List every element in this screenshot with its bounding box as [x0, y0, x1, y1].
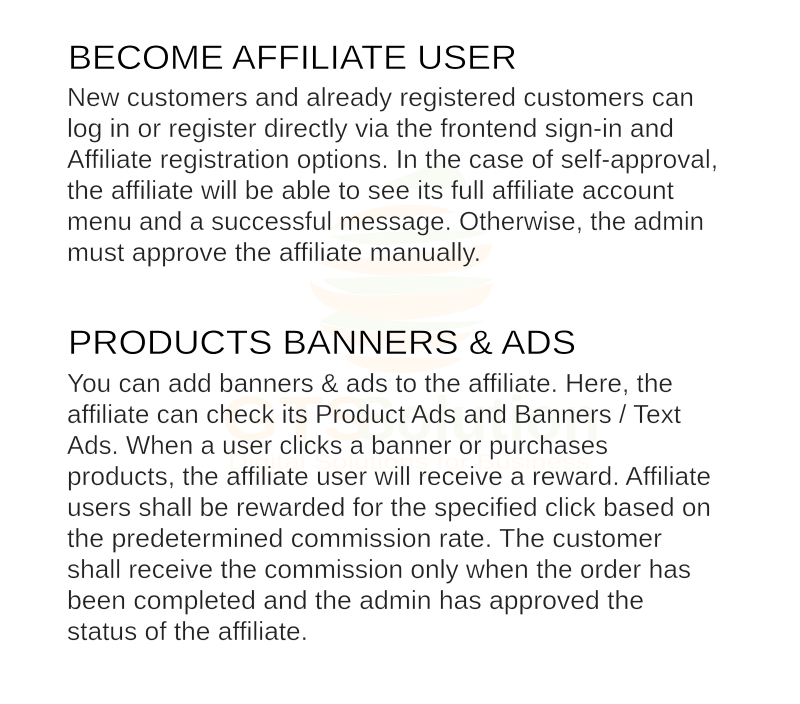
text block: become affiliate user: New customers and already registered customers can [67, 82, 694, 112]
text block: products banners and ads: status of the affiliate. [67, 616, 308, 646]
text block: products banners and ads: Ads. When a user clicks a banner or purchases [67, 430, 608, 460]
text block: products banners and ads: products, the affiliate user will receive a reward. Affiliate [67, 461, 711, 491]
heading: become affiliate user: BECOME AFFILIATE USER [68, 39, 517, 77]
text block: become affiliate user: Affiliate registration options. In the case of self-approval, [67, 144, 718, 174]
text block: products banners and ads: been completed and the admin has approved the [67, 585, 644, 615]
text block: products banners and ads: shall receive the commission only when the order has [67, 554, 691, 584]
watermark icon [310, 160, 493, 373]
text block: become affiliate user: must approve the affiliate manually. [67, 237, 481, 267]
text block: become affiliate user: the affiliate will be able to see its full affiliate account [67, 175, 675, 205]
watermark logo [222, 160, 600, 474]
text block: products banners and ads: users shall be rewarded for the specified click based on [67, 492, 711, 522]
text block: products banners and ads [67, 368, 711, 646]
text block: become affiliate user [67, 82, 718, 267]
watermark wordmark [222, 385, 600, 454]
watermark tagline: Digital Solutions for Business [228, 451, 590, 474]
text block: become affiliate user: log in or register directly via the frontend sign-in and [67, 113, 674, 143]
watermark wordmark: Solution [355, 385, 600, 454]
text block: products banners and ads: affiliate can check its Product Ads and Banners / Text [67, 399, 682, 429]
watermark wordmark: GTS [222, 385, 372, 454]
text block: products banners and ads: the predetermined commission rate. The customer [67, 523, 662, 553]
text block: become affiliate user: menu and a successful message. Otherwise, the admin [67, 206, 704, 236]
heading: products banners and ads: PRODUCTS BANNERS & ADS [68, 324, 576, 362]
text block: products banners and ads: You can add banners & ads to the affiliate. Here, the [67, 368, 673, 398]
